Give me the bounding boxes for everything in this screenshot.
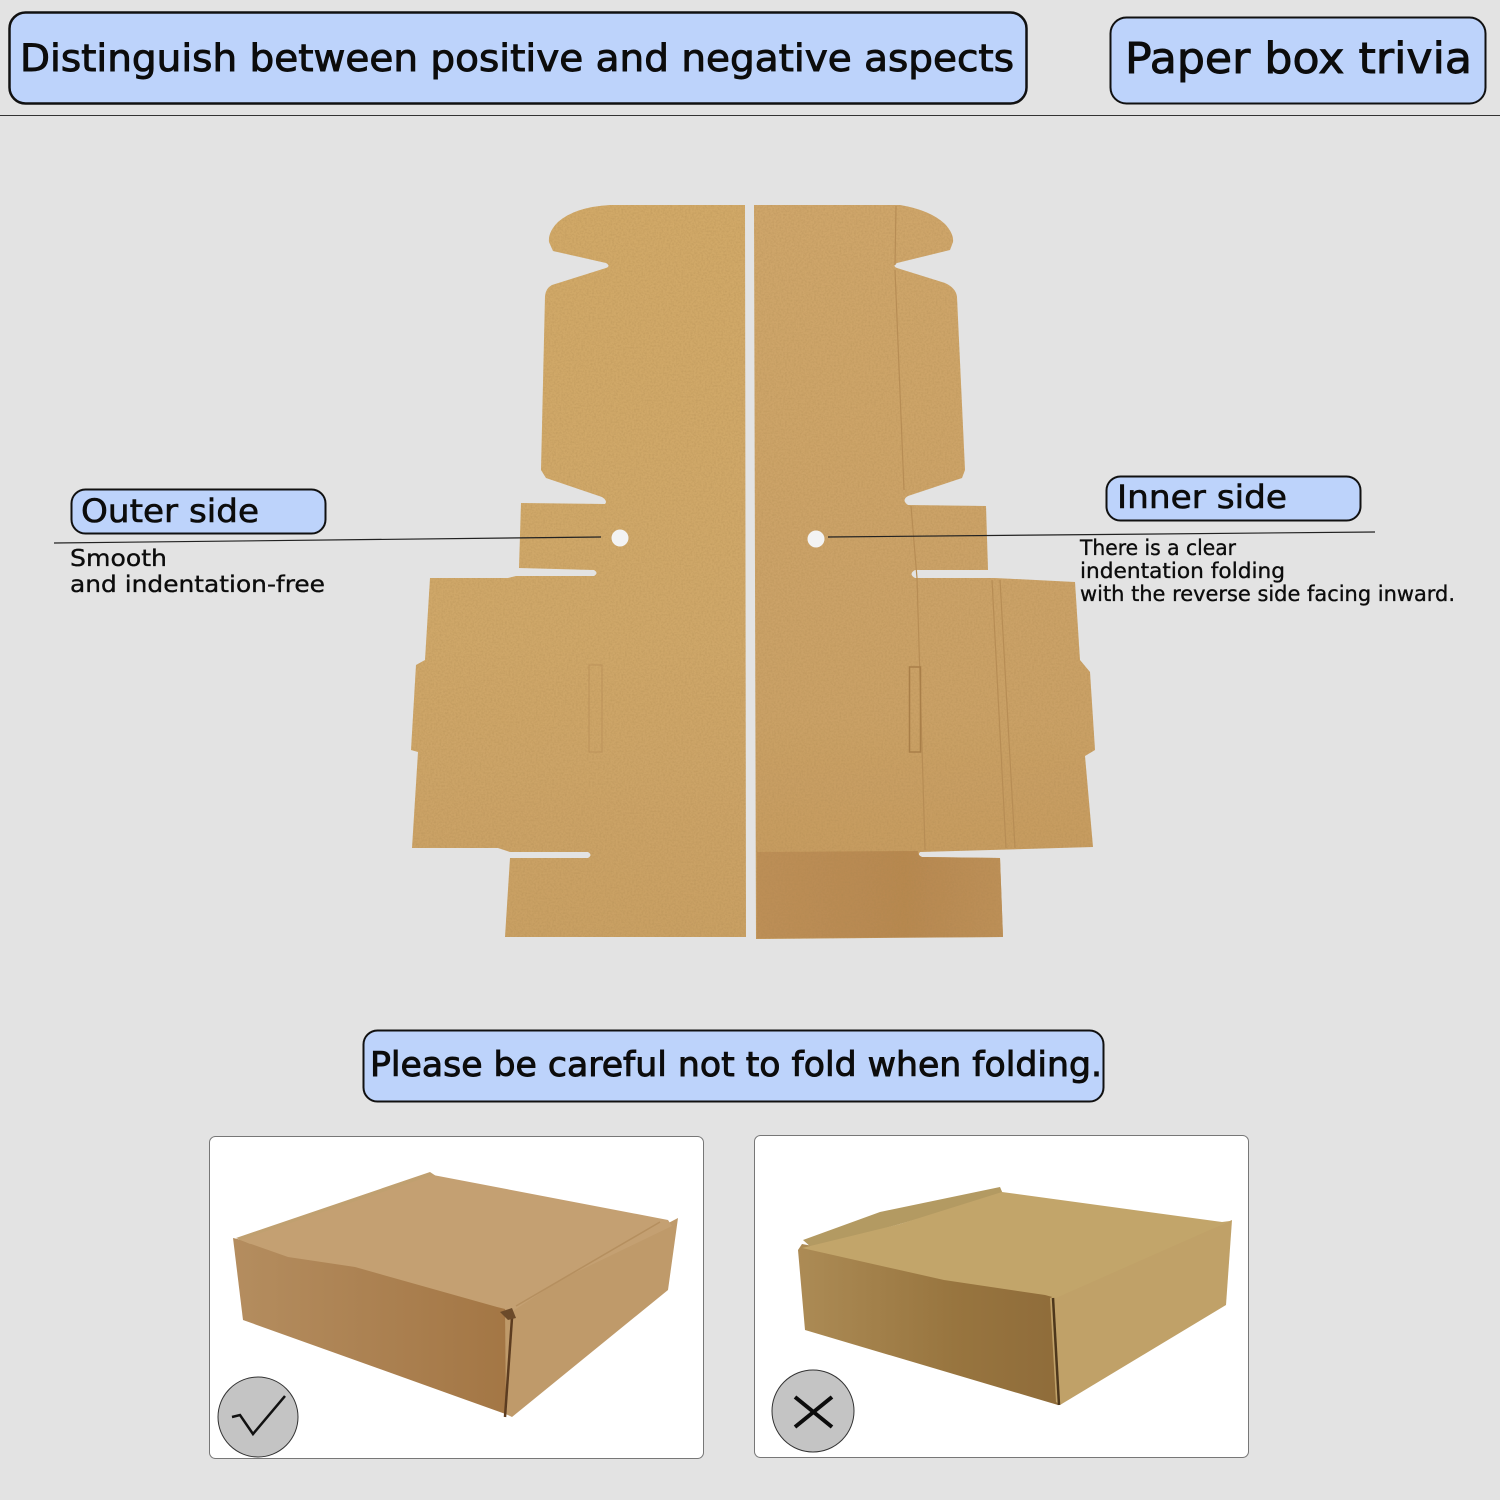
- callout: inner side: indentation folding: [1080, 559, 1285, 583]
- heading: folding caution: Please be careful not to fold when folding.: [370, 1045, 1102, 1085]
- heading: paper box trivia: Paper box trivia: [1125, 34, 1472, 84]
- box: incorrectly folded: [798, 1187, 1232, 1405]
- heading: folding caution: [364, 1030, 1104, 1102]
- callout: outer side: Outer side: [81, 492, 259, 530]
- heading: paper box trivia: [1110, 18, 1486, 104]
- panel: correct folding: [210, 1136, 704, 1458]
- heading: distinguish positive and negative: [10, 12, 1026, 104]
- unfolded box: outer side: [411, 205, 746, 937]
- unfolded box: inner side: [754, 205, 1095, 939]
- callout: inner side: with the reverse side facing inward.: [1080, 582, 1455, 606]
- fold lines: [895, 206, 1015, 850]
- badge: check mark: [218, 1377, 298, 1457]
- hole: outer side: [612, 530, 628, 546]
- callout: outer side: Smooth: [70, 546, 167, 572]
- callout: inner side: There is a clear: [1079, 536, 1236, 560]
- box: correctly folded: [233, 1172, 678, 1417]
- heading: distinguish positive and negative: Distinguish between positive and negative aspects: [20, 37, 1014, 80]
- callout: inner side: Inner side: [1117, 478, 1287, 516]
- callout: outer side: [54, 490, 601, 598]
- callout: outer side: and indentation-free: [70, 572, 325, 598]
- bottom flap shade: [757, 851, 1003, 938]
- badge: cross mark: [772, 1370, 854, 1452]
- panel: incorrect folding: [754, 1136, 1248, 1458]
- hole: inner side: [808, 530, 824, 548]
- callout: inner side: [828, 476, 1455, 606]
